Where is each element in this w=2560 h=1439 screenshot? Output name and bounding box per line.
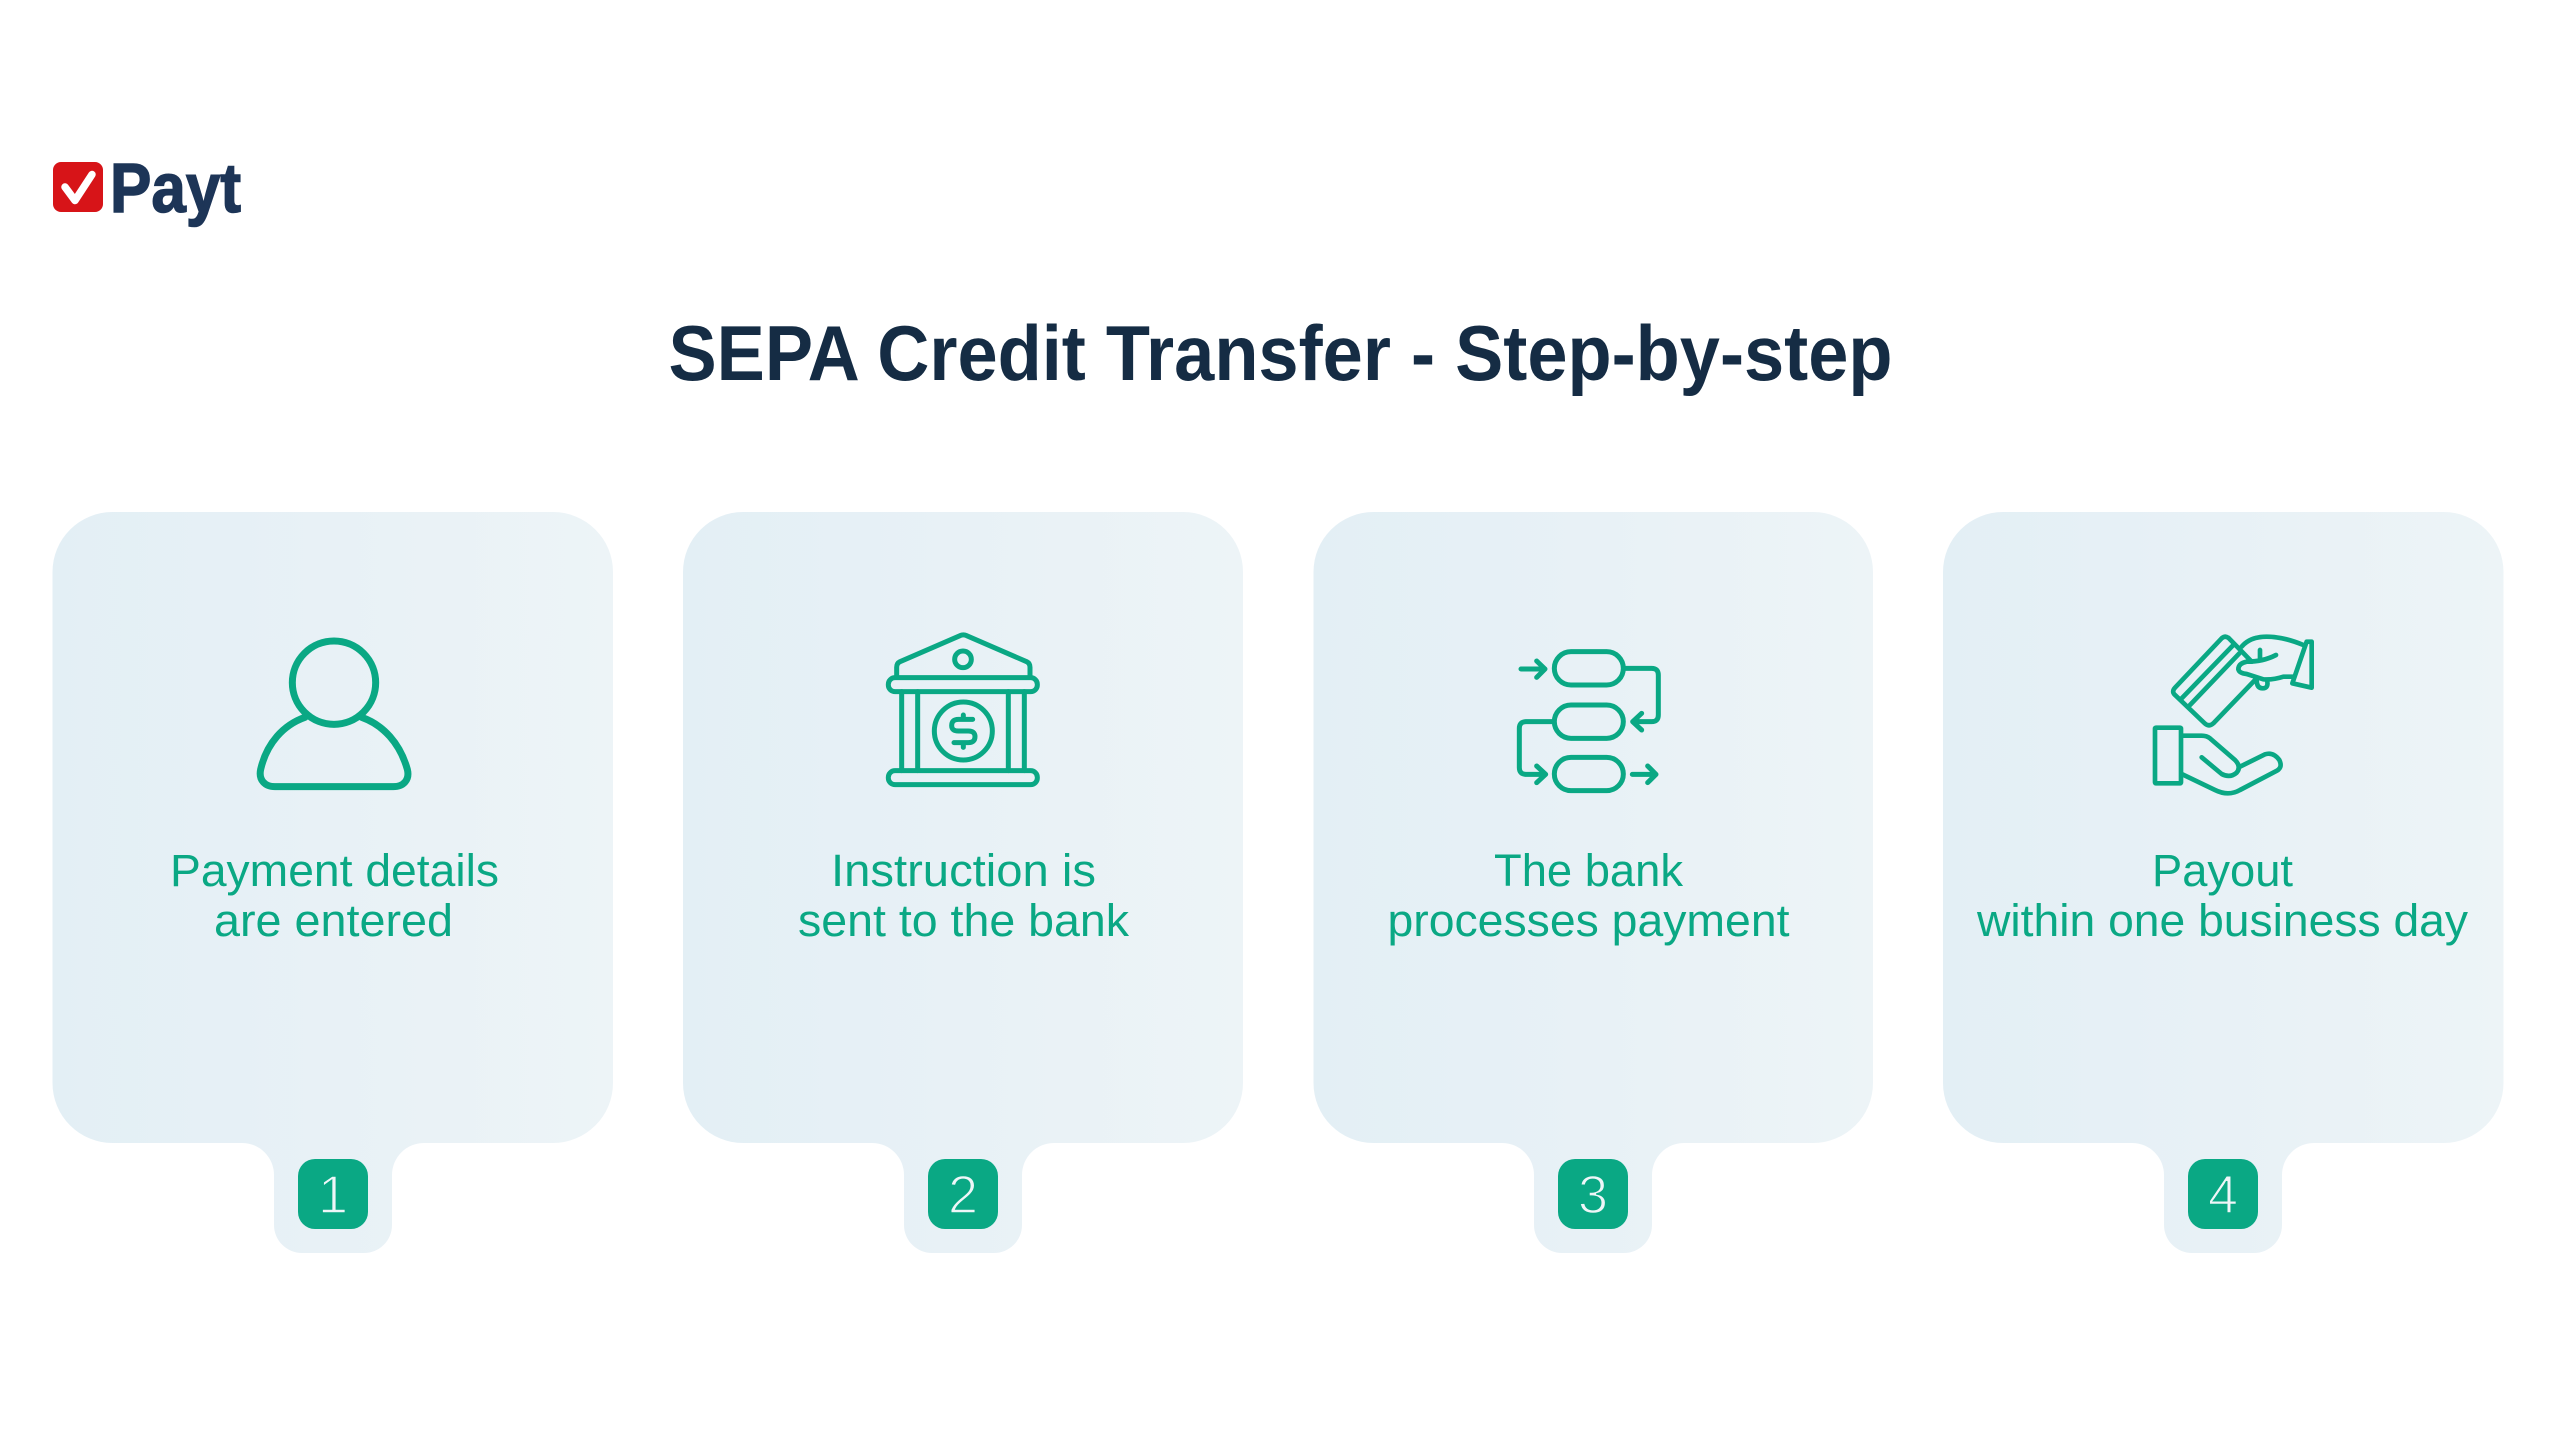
badge: 2: 2: [948, 1165, 978, 1225]
badge: 4: [2188, 1159, 2258, 1229]
panel: step 2: [683, 512, 1243, 1253]
text: step 3 description: The bank: [1494, 845, 1684, 896]
badge: 1: 1: [318, 1165, 348, 1225]
text: step 4 description: [1976, 845, 2469, 946]
badge: 2: [928, 1159, 998, 1229]
text: step 2 description: Instruction is: [831, 845, 1096, 896]
logo: Payt: Payt: [110, 149, 241, 227]
icon: hand with card: [2155, 637, 2312, 793]
text: step 1 description: Payment details: [170, 845, 499, 896]
panel: step 4: [1943, 512, 2504, 1253]
text: step 1 description: [170, 845, 499, 946]
card shape 3: [1314, 512, 1873, 1253]
card shape 2: [683, 512, 1243, 1253]
badge: 3: [1558, 1159, 1628, 1229]
panel: step 3: [1314, 512, 1873, 1253]
badge: 4: 4: [2208, 1165, 2238, 1225]
badge: 1: [298, 1159, 368, 1229]
badge: 3: 3: [1578, 1165, 1608, 1225]
text: step 3 description: [1388, 845, 1790, 946]
card shape 1: [52, 512, 613, 1253]
panel: step 1: [52, 512, 613, 1253]
icon: person: [260, 641, 408, 787]
icon: process flow: [1519, 652, 1658, 791]
icon: bank: [888, 635, 1037, 785]
text: step 3 description: processes payment: [1388, 895, 1790, 946]
text: step 2 description: sent to the bank: [798, 895, 1130, 946]
card shape 4: [1943, 512, 2504, 1253]
text: step 2 description: [798, 845, 1130, 946]
logo: Payt: [53, 149, 241, 227]
text: step 1 description: are entered: [214, 895, 453, 946]
title: SEPA Credit Transfer - Step-by-step: [668, 309, 1892, 397]
text: step 4 description: Payout: [2152, 845, 2293, 896]
text: step 4 description: within one business day: [1976, 895, 2469, 946]
